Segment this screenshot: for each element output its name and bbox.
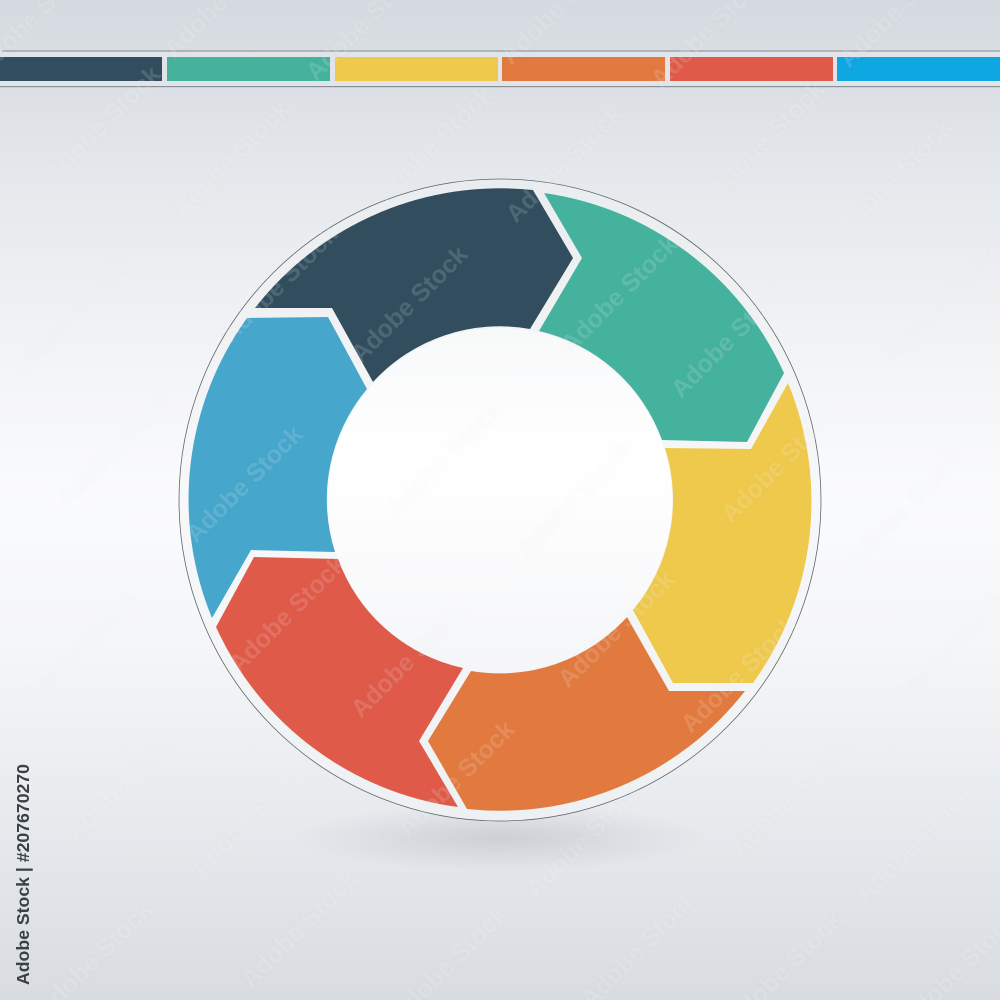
watermark text: Adobe Stock <box>840 445 968 573</box>
watermark text: Adobe Stock <box>345 240 473 368</box>
watermark text: Adobe Stock <box>555 230 683 358</box>
watermark text: Adobe Stock <box>392 715 520 843</box>
watermark text: Adobe Stock <box>180 420 308 548</box>
watermark text: Adobe Stock <box>345 595 473 723</box>
watermark text: Adobe Stock <box>520 775 648 903</box>
watermark text: Adobe Stock <box>850 780 978 908</box>
vertical stock id label: Adobe Stock | #207670270 <box>13 764 33 985</box>
segment: blue arrow <box>189 317 367 618</box>
cycle wheel <box>189 188 811 811</box>
outer disc with thin outline <box>179 179 821 821</box>
segment: yellow arrow <box>633 383 811 683</box>
watermark text: Adobe Stock <box>500 100 628 228</box>
watermark text: Adobe Stock <box>370 80 498 208</box>
watermark text: Adobe Stock <box>715 400 843 528</box>
watermark text: Adobe Stock <box>15 585 143 713</box>
watermark text: Adobe Stock <box>552 565 680 693</box>
watermark text: Adobe Stock <box>185 755 313 883</box>
drop shadow under wheel <box>295 804 705 872</box>
watermark text: Adobe Stock <box>665 275 793 403</box>
watermark text: Adobe Stock <box>215 220 343 348</box>
watermark text: Adobe Stock <box>725 735 853 863</box>
watermark text: Adobe Stock <box>223 550 351 678</box>
watermark text: Adobe Stock <box>167 95 295 223</box>
segment: red arrow <box>216 557 463 807</box>
centre circle <box>328 328 672 672</box>
segment: orange arrow <box>428 617 745 811</box>
watermark text: Adobe Stock <box>5 255 133 383</box>
watermark text: Adobe Stock <box>510 435 638 563</box>
watermark text: Adobe Stock <box>38 60 166 188</box>
watermark text: Adobe Stock <box>50 385 178 513</box>
watermark text: Adobe Stock <box>60 718 188 846</box>
segment: teal arrow <box>539 193 784 442</box>
watermark text: Adobe Stock <box>702 75 830 203</box>
segment: navy arrow <box>255 188 573 382</box>
watermark text: Adobe Stock <box>380 395 508 523</box>
watermark text: Adobe Stock <box>675 610 803 738</box>
watermark text: Adobe Stock <box>830 113 958 241</box>
watermark text: Adobe Stock <box>235 865 363 993</box>
colour legend strip <box>0 50 1000 87</box>
